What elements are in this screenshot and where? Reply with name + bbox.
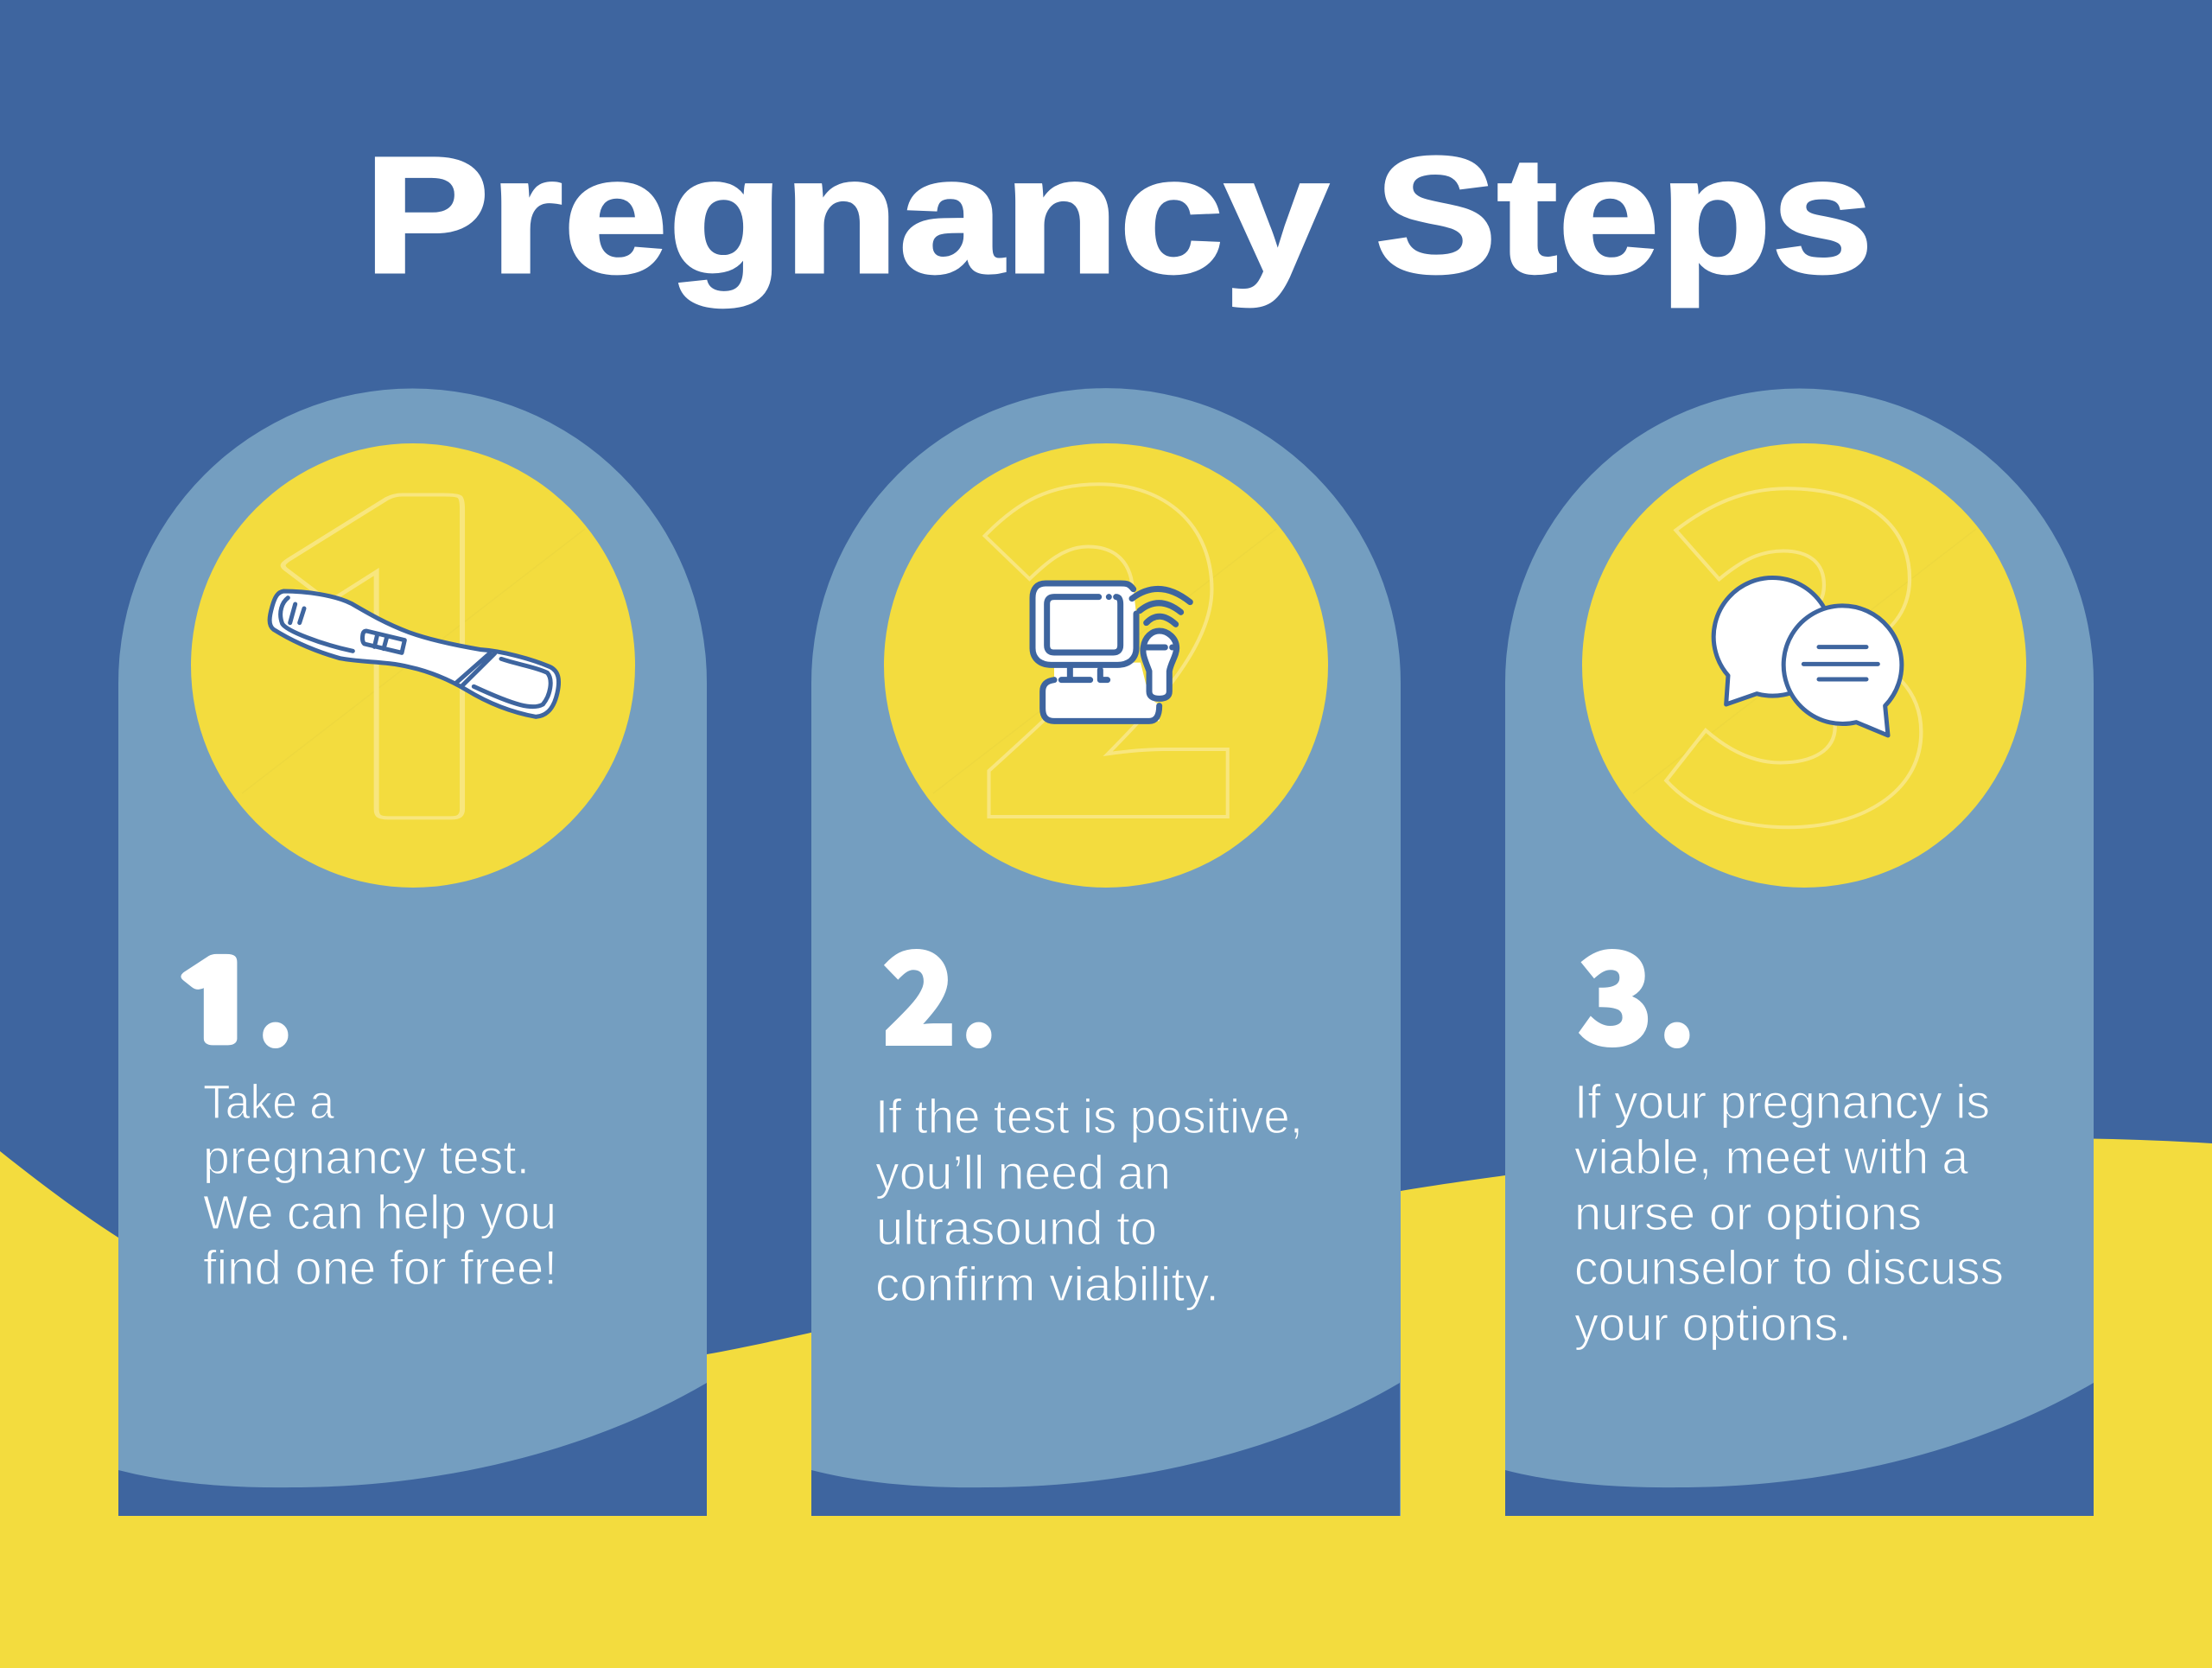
panel: step 3 bbox=[1505, 300, 2094, 1516]
panel 3 text bbox=[1574, 1074, 2004, 1351]
panel 2 ghost numeral: 2 bbox=[969, 296, 1251, 946]
panel 2 text: If the test is positive, bbox=[875, 1089, 1303, 1143]
panel 2 text: you’ll need an bbox=[875, 1145, 1171, 1200]
panel 1 number: . bbox=[257, 921, 295, 1077]
panel 3 number: . bbox=[1658, 921, 1696, 1077]
panel 2 number: 2 bbox=[882, 899, 957, 1081]
panel 1 arch bbox=[118, 389, 707, 1516]
panel 1 text: pregnancy test. bbox=[203, 1130, 530, 1184]
panel 3 bottom curve bbox=[1505, 1383, 2094, 1516]
panel 3 text: viable, meet with a bbox=[1574, 1130, 1969, 1184]
panel 2 number bbox=[882, 899, 998, 1081]
panel 3 text: If your pregnancy is bbox=[1574, 1074, 1990, 1129]
panel 2 arch bbox=[811, 388, 1401, 1516]
icon: speech bubbles bbox=[1713, 577, 1902, 735]
panel 1 text: We can help you bbox=[203, 1185, 556, 1239]
title bbox=[364, 122, 1873, 308]
icon: ultrasound machine bbox=[1033, 583, 1190, 721]
panel 1 yellow circle bbox=[191, 443, 635, 888]
panel 3 text: counselor to discuss bbox=[1574, 1240, 2004, 1295]
panel 2 bottom curve bbox=[811, 1383, 1400, 1516]
panel 2 text: ultrasound to bbox=[876, 1200, 1157, 1255]
panel 3 number: 3 bbox=[1578, 899, 1653, 1081]
panel 2 number: . bbox=[960, 921, 998, 1077]
panel 2 yellow circle bbox=[884, 443, 1328, 888]
panel 3 text: your options. bbox=[1574, 1296, 1852, 1351]
yellow wave background bbox=[0, 1138, 2212, 1668]
panel: step 2 bbox=[811, 296, 1401, 1516]
panel 3 ghost numeral: 3 bbox=[1655, 300, 1948, 951]
panel 3 text: nurse or options bbox=[1574, 1186, 1922, 1240]
title: Steps bbox=[1375, 122, 1873, 308]
panel 1 text bbox=[203, 1074, 557, 1295]
panel: step 1 bbox=[118, 389, 707, 1516]
icon: pregnancy test bbox=[270, 591, 559, 716]
panel 3 arch bbox=[1505, 389, 2094, 1516]
panel 2 text bbox=[875, 1089, 1303, 1311]
panel 3 yellow circle bbox=[1582, 443, 2026, 888]
panel 1 ghost numeral: 1 bbox=[217, 461, 596, 877]
panel 1 number: 1 bbox=[171, 950, 264, 1056]
title: Pregnancy bbox=[364, 122, 1329, 308]
panel 1 text: Take a bbox=[203, 1074, 335, 1129]
panel 1 text: find one for free! bbox=[203, 1240, 557, 1295]
panel 1 number bbox=[171, 921, 295, 1077]
panel 1 bottom curve bbox=[118, 1383, 707, 1516]
panel 3 number bbox=[1578, 899, 1696, 1081]
panel 2 text: confirm viability. bbox=[875, 1257, 1219, 1311]
